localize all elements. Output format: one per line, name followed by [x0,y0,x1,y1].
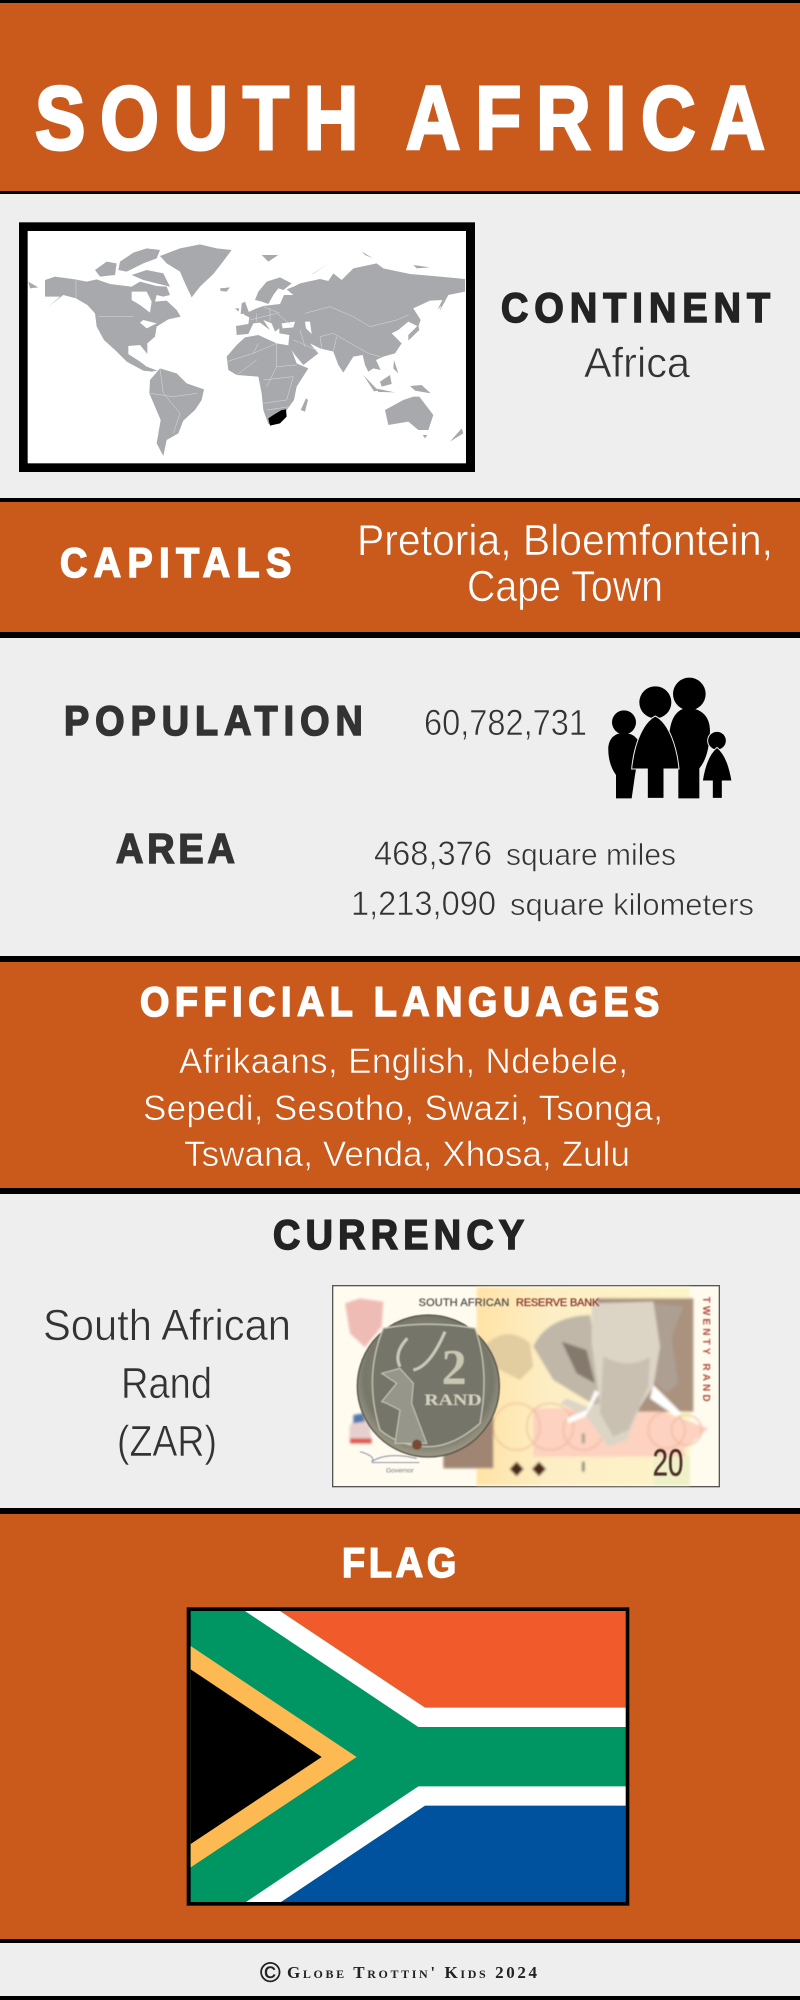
blue red emblem [349,1417,372,1444]
right ear [653,1303,683,1393]
brown portrait background [597,1298,693,1412]
currency name: Rand [121,1359,212,1408]
currency name: (ZAR) [117,1417,217,1466]
signature [360,1452,419,1463]
capitals list [357,516,773,611]
title: SOUTH AFRICA [35,68,765,168]
icon: copyright: © [260,1957,281,1988]
continent value: Africa [584,339,691,386]
note lettering: 20 [653,1442,683,1485]
small elephants [483,1334,533,1380]
languages list [143,1042,663,1174]
flag of South Africa [187,1607,629,1906]
area values: 1,213,090 [351,885,496,923]
panel: official languages [0,956,800,1194]
capitals list: Cape Town [467,562,663,611]
footer credit: Globe Trottin' Kids 2024 [287,1963,538,1982]
panel: currency [43,1212,719,1487]
population heading: POPULATION [64,698,363,744]
diamonds [510,1462,546,1476]
languages list: Tswana, Venda, Xhosa, Zulu [184,1135,630,1174]
area heading: AREA [116,826,235,872]
footer [0,1957,800,2000]
head [560,1302,660,1447]
note lettering: SOUTH AFRICAN [419,1297,509,1309]
trunk shade [600,1357,650,1437]
note lettering: RESERVE BANK [516,1297,600,1309]
area values [351,835,754,923]
note lettering [386,1297,711,1485]
continent heading: CONTINENT [501,285,770,331]
panel: population and area [64,678,754,923]
map continents [28,244,465,456]
crest [345,1298,383,1347]
country borders [76,280,408,433]
tusks [567,1390,599,1423]
languages heading: OFFICIAL LANGUAGES [140,979,659,1025]
currency name: South African [43,1301,291,1350]
panel: capitals [0,498,800,638]
flag heading: FLAG [342,1540,456,1586]
languages list: Afrikaans, English, Ndebele, [179,1042,628,1081]
coin [357,1315,499,1457]
coin: 2 [442,1338,467,1394]
panel: world map with continent [19,222,770,472]
area values: square kilometers [510,887,754,922]
left ear [533,1315,603,1410]
population value: 60,782,731 [424,702,587,743]
icon: family [608,678,732,798]
note lettering: TWENTY RAND [700,1297,711,1402]
area values: square miles [506,837,676,872]
world map frame [19,222,475,472]
currency name [43,1301,291,1466]
capitals heading: CAPITALS [60,540,291,586]
languages list: Sepedi, Sesotho, Swazi, Tsonga, [143,1089,663,1128]
panel: flag [0,1508,800,1943]
note lettering: Governor [386,1468,415,1475]
highlighted South Africa [268,409,287,426]
currency heading: CURRENCY [273,1212,524,1258]
banknote and coin [333,1286,719,1487]
title banner [0,0,800,194]
area values: 468,376 [374,835,492,873]
coin: RAND [424,1392,482,1409]
capitals list: Pretoria, Bloemfontein, [357,516,773,565]
water bodies [132,292,312,334]
